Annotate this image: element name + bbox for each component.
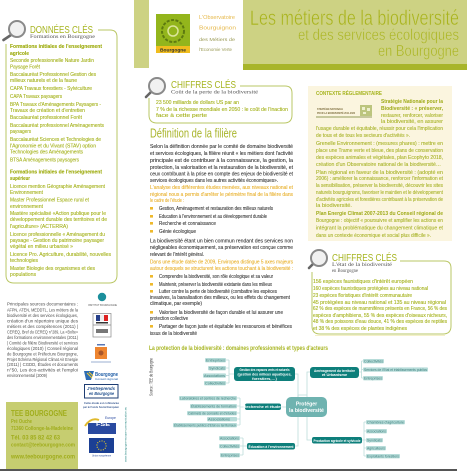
list: périmètre: Recherche et connaissance xyxy=(159,221,216,227)
logo: Observatoire Bourguignon: Bourgogne xyxy=(160,48,186,54)
pills: acteurs aménagement: Entreprises xyxy=(364,375,382,380)
text: formations agricoles: milieux naturels et de la faune xyxy=(10,78,77,84)
logo caption: L'Observatoire xyxy=(199,15,235,21)
panel: définition de la filière xyxy=(150,126,293,337)
list: périmètre: Gestion, Aménagement et restauration des milieux naturels xyxy=(159,206,273,212)
pills: acteurs éducation: Entreprises xyxy=(221,452,239,457)
heading: chiffres clés: Coût de la perte de la biodiversité xyxy=(171,90,259,96)
heading: chiffres clés: en Bourgogne xyxy=(332,268,359,274)
text: définition paragraphe: services écologiques dans les autres activités économiques». xyxy=(150,178,278,184)
text: plan régional xyxy=(316,170,443,209)
pills: acteurs production: Chambres d'agriculture xyxy=(367,419,404,424)
text: plan énergie climat: Bourgogne : objectif « poursuivre et amplifier les actions en xyxy=(316,218,443,224)
pills: acteurs recherche: Laboratoires et centres de recherche xyxy=(180,395,236,400)
pills: acteurs recherche xyxy=(173,395,237,427)
text: sources documentaires: environnemental (2009) xyxy=(7,373,47,379)
text: biodiversité bien commun: La biodiversité étant un bien commun rendant des services non xyxy=(150,239,293,245)
panel: chiffres clés état xyxy=(309,250,451,334)
list: cinq axes: climatique, par exemple) xyxy=(150,301,202,307)
logo caption xyxy=(199,15,236,52)
list: cinq axes: Partager de façon juste et équitable les ressources et bénéfices xyxy=(159,324,292,330)
list: périmètre xyxy=(150,206,273,235)
text: cofinancement xyxy=(83,401,119,409)
text: formations agricoles: Paysage Forêt xyxy=(10,64,40,70)
pills: acteurs aménagement: Collectivités xyxy=(364,358,383,363)
text: vertical url: www.bourgogne-europe-communication.eu xyxy=(124,407,128,462)
text: formations agricoles: l'Agronomie et du Vivant (STAV) option xyxy=(10,143,96,149)
text: formations agricoles: Baccalauréat professionnel Forêt xyxy=(10,115,82,121)
text: sources documentaires: des formations environnementales (2011) xyxy=(7,335,78,341)
text: état de la biodiversité: et 38 % des espèces de plantes indigènes xyxy=(313,326,407,332)
panel: contact TEE Bourgogne: www.teebourgogne.com xyxy=(10,454,75,460)
pills: acteurs production: Associations xyxy=(367,428,386,433)
pills: acteurs gestion: Syndicats xyxy=(209,365,225,370)
text: formations agricoles: Formations initiales de l'enseignement xyxy=(10,44,102,50)
list: cinq axes: Maintenir, préserver la biodiversité existante dans les milieux xyxy=(159,282,272,288)
image: stratégie nationale thumbnail xyxy=(316,105,372,117)
text: cofinancement: Cette étude est cofinancée xyxy=(84,401,119,405)
logo: ademe xyxy=(91,344,111,363)
icon: teal round logo xyxy=(88,293,117,307)
text: enviropea xyxy=(150,260,293,272)
text: formations supérieures xyxy=(10,170,111,278)
text: analyse: L'analyse des différentes études menées, aux niveaux national et xyxy=(150,185,293,191)
heading: données clés: DONNÉES CLÉS xyxy=(30,23,93,36)
text: sources documentaires: (2011) | CGDD, Études et documents xyxy=(7,361,78,368)
text: stratégie nationale: Stratégie Nationale pour la xyxy=(381,99,443,105)
list: cinq axes: issus de la biodiversité xyxy=(150,331,197,337)
text: sources documentaires: CEREQ, Bref du CEREQ n°289, La «Boîte» xyxy=(7,330,78,336)
text: analyse xyxy=(150,185,293,204)
text: plan régional: 2006) : améliorer la connaissance, renforcer l'information et xyxy=(316,176,443,182)
logo: Europe Bourgogne: FSE xyxy=(96,422,111,428)
logo: Observatoire Bourguignon xyxy=(156,14,190,54)
logo caption: l'Economie Verte xyxy=(199,47,233,52)
logo: union européenne flag xyxy=(89,438,114,458)
panel: contact TEE Bourgogne xyxy=(6,402,78,469)
text: grenelle: création d'un Observatoire national de la biodiversité… xyxy=(316,162,441,168)
text: état de la biodiversité: 156 espèces faunistiques d'intérêt européen xyxy=(313,279,413,285)
text: formations agricoles: Seconde professionnelle Nature Jardin xyxy=(10,58,94,64)
text: formations agricoles: CAPA Travaux paysagers xyxy=(10,94,62,100)
text: état de la biodiversité: espèces d'amphibiens, 55 % des espèces d'oiseaux nicheurs, xyxy=(313,313,447,319)
text: stratégie nationale: Biodiversité : « préserver, xyxy=(381,106,443,112)
text: stratégie nationale: la biodiversité, en assurer xyxy=(381,119,443,125)
panel: contexte réglementaire xyxy=(308,86,452,241)
text: biodiversité bien commun: négligeables économiquement, sa préservation est conçue comme xyxy=(150,245,293,251)
text: sources documentaires: AFPN, ATEN, MEDDTL, Les métiers de la xyxy=(7,308,78,314)
icon: magnifier xyxy=(4,21,25,40)
heading: contexte: CONTEXTE RÉGLEMENTAIRE xyxy=(316,89,382,97)
text: sources documentaires: de Bourgogne et Préfecture Bourgogne, xyxy=(7,352,78,358)
image: stratégie nationale thumbnail: POUR LA BIODIVERSITÉ 2011-2020 xyxy=(317,110,355,115)
text: coût: 7 % de la richesse mondiale en 2050 : le coût de l'inaction xyxy=(156,107,288,113)
text: formations supérieures: Master Professionnel Espace rural et xyxy=(10,198,89,204)
node: centre: la biodiversité xyxy=(289,408,324,414)
list: cinq axes: Valoriser la biodiversité de façon durable et lui assurer une xyxy=(159,310,283,316)
text: sources documentaires: Projet Schéma Régional Climat Air Energie xyxy=(7,357,78,363)
pills: acteurs gestion: Associations xyxy=(204,373,225,378)
text: sources documentaires xyxy=(7,302,79,379)
icon: magnifier xyxy=(146,78,165,97)
diagram: protéger la biodiversité xyxy=(173,357,428,458)
text: formations supérieures: populations xyxy=(10,272,36,278)
text: définition paragraphe: et services écologiques, la filière réunit « les métiers dont l'activité xyxy=(150,151,293,157)
text: formations supérieures: Environnement xyxy=(10,190,43,196)
text: définition paragraphe: protection, la valorisation et la restauration de la biodiversité, et xyxy=(150,165,293,171)
partner logos xyxy=(83,293,128,462)
logo: Europe Bourgogne: Europe xyxy=(105,416,116,420)
pills: acteurs recherche: Établissements publics d'Etat ou territoriaux xyxy=(174,422,236,427)
text: formations agricoles: Travaux de création et d'entretien xyxy=(10,108,85,114)
title xyxy=(250,7,459,60)
header band xyxy=(134,0,467,70)
node: éducation xyxy=(247,443,295,450)
logo: préfecture xyxy=(93,314,111,337)
text: stratégie nationale: de tous et de tous les secteurs d'activités ». xyxy=(316,133,410,139)
logo caption: Bourguignon xyxy=(199,26,236,32)
decorative faint line xyxy=(315,334,445,336)
heading: chiffres clés: L'état de la biodiversité xyxy=(332,262,393,268)
logo: Bourgogne conseil régional: Conseil régional xyxy=(95,377,119,381)
text: formations agricoles: BTSA Aménagements paysagers xyxy=(10,158,79,164)
panel: contact TEE Bourgogne: 71360 Collonge-la-Madeleine xyxy=(11,426,73,432)
text: plan régional: la biodiversité. xyxy=(316,203,352,209)
node: aménagement xyxy=(310,367,359,378)
logo: union européenne flag: Union européenne xyxy=(92,454,111,458)
pills: acteurs recherche: Associations xyxy=(208,416,230,421)
node: gestion des espaces: Gestion des espaces verts et naturels xyxy=(240,367,290,372)
text: formations supérieures: végétal en milieu urbanisé » xyxy=(10,244,73,250)
logo: Europe Bourgogne xyxy=(85,416,116,434)
text: état de la biodiversité: 45 protégées au niveau national et 135 au niveau régional xyxy=(313,300,446,306)
panel: contact TEE Bourgogne: contact@teebourgogne.com xyxy=(11,442,75,448)
text: formations supérieures: Mastère spécialisé «Action publique pour le xyxy=(10,211,106,217)
text: état de la biodiversité xyxy=(313,279,447,332)
icon: teal round logo: INSTITUT BOURGOGNE xyxy=(88,303,117,307)
text: état de la biodiversité: 48 % des poissons d'eau douce, 41 % des espèces de reptiles xyxy=(313,319,447,325)
text: stratégie nationale xyxy=(316,99,443,139)
pills: acteurs aménagement xyxy=(363,358,428,380)
pills: acteurs éducation: Collectivités xyxy=(220,443,239,448)
logo: Bourgogne conseil régional xyxy=(84,371,119,381)
pills: acteurs éducation xyxy=(219,435,240,457)
text: formations agricoles xyxy=(10,44,104,164)
text: biodiversité bien commun: relevant de l'intérêt général. xyxy=(150,252,204,258)
heading: protection de la biodiversité: La protection de la biodiversité : domaines professionnels et types d'acteurs xyxy=(149,345,328,352)
node: production: Production agricole et sylvicole xyxy=(314,438,361,443)
text: enviropea: Dans une étude datée de 2009, Enviropea distingue 5 axes majeurs xyxy=(150,260,293,266)
text: plan énergie climat: dans un contexte économique et social plus difficile ». xyxy=(316,233,431,239)
pills: acteurs production: Exploitants forestiers xyxy=(367,453,399,458)
text: plan énergie climat: Plan Energie Climat 2007-2013 du Conseil régional de xyxy=(316,211,443,217)
text: coût: 23 500 milliards de dollars US par an xyxy=(156,100,239,106)
text: analyse: régional nous a permis d'arrêter le périmètre final de la filière dans xyxy=(150,192,293,198)
pills: acteurs gestion xyxy=(203,357,226,385)
text: sources documentaires: biodiversité et des services écologiques, xyxy=(7,313,78,319)
list: cinq axes: Comprendre la biodiversité, son rôle écologique et sa valeur xyxy=(159,274,273,280)
text: formations agricoles: BPA Travaux d'Aménagements Paysagers - xyxy=(10,102,101,108)
text: définition paragraphe: principale est de contribuer à la connaissance, la gestion, la xyxy=(150,158,293,164)
text: stratégie nationale: l'usage durable et équitable, réussir pour cela l'implication xyxy=(316,126,443,132)
pills: acteurs recherche: Établissements de formation xyxy=(191,403,236,408)
list: cinq axes: invasives, la banalisation des milieux, ou les effets du changement xyxy=(150,295,290,301)
text: sources documentaires: | Comité de filière Biodiversité et services xyxy=(7,340,78,346)
text: définition paragraphe xyxy=(150,144,293,184)
text: formations supérieures: Licence mention Géographie Aménagement xyxy=(10,184,105,190)
text: formations agricoles: Baccalauréat Professionnel Gestion des xyxy=(10,72,96,78)
heading: définition: Définition de la filière xyxy=(150,126,237,140)
list: cinq axes xyxy=(150,274,292,337)
text: formations supérieures: Master Biologie des organismes et des xyxy=(10,266,95,272)
node: centre xyxy=(286,397,327,417)
pills: acteurs gestion: Collectivités xyxy=(205,380,225,385)
node: aménagement: Aménagement du territoire xyxy=(314,368,356,373)
panel: données clés xyxy=(4,21,117,283)
list: cinq axes: protection collective xyxy=(150,316,188,322)
logo: j'entreprends en Bourgogne xyxy=(84,384,118,398)
panel: chiffres clés coût xyxy=(146,78,292,123)
text: source vertical: Source : TEE de Bourgogne xyxy=(148,358,154,396)
node: production xyxy=(312,437,362,444)
node: aménagement: et Urbanisme xyxy=(322,372,348,377)
text: formations agricoles: Technologies des Aménagements xyxy=(10,149,83,155)
text: grenelle xyxy=(316,141,443,168)
text: formations agricoles: CAPA Travaux forestiers - Sylviculture xyxy=(10,86,92,92)
text: coût xyxy=(156,100,288,119)
text: formations agricoles: Baccalauréat professionnel Aménagements xyxy=(10,123,104,129)
text: définition paragraphe: ceux contribuant à la prise en compte des enjeux de biodiversité et xyxy=(150,172,293,178)
text: état de la biodiversité: 23 espèces floristiques d'intérêt communautaire xyxy=(313,293,412,299)
image: stratégie nationale thumbnail: STRATÉGIE NATIONALE xyxy=(317,106,343,111)
text: plan régional: la sensibilisation, préserver la biodiversité, découvrir les sites xyxy=(316,183,443,189)
text: formations supérieures: environnement xyxy=(10,204,43,210)
text: sources documentaires: écologiques (2010) | Conseil régional xyxy=(7,346,78,352)
text: plan régional: Plan régional en faveur de la biodiversité : (adopté en xyxy=(316,170,443,176)
node: gestion des espaces: (gestion des milieux aquatiques, xyxy=(238,372,292,376)
pills: acteurs aménagement: Services de l'Etat et établissements publics xyxy=(364,367,427,372)
text: grenelle: place une Trame verte et bleue, des plans de conservation xyxy=(316,148,443,154)
text: analyse: le cadre de l'étude : xyxy=(150,198,184,204)
text: stratégie nationale: restaurer, renforcer, valoriser xyxy=(381,113,443,119)
text: formations supérieures: Formations initiales de l'enseignement xyxy=(10,170,102,176)
node: gestion des espaces: forestiers,…) xyxy=(252,376,277,381)
heading: chiffres clés xyxy=(332,251,397,274)
text: plan énergie climat xyxy=(316,211,444,239)
list: périmètre: Education à l'environnement et au développement durable xyxy=(159,214,267,220)
text: enviropea: autour desquels se structurent les actions touchant à la biodiversité : xyxy=(150,266,293,272)
text: formations agricoles: agricole xyxy=(10,51,29,57)
text: plan énergie climat: intégrant la problématique du changement climatique et xyxy=(316,226,444,232)
text: état de la biodiversité: 160 espèces faunistiques protégées au niveau national xyxy=(313,286,428,292)
text: sources documentaires: métiers et des compétences (2011) | xyxy=(7,324,78,330)
pills: acteurs production xyxy=(366,419,405,458)
text: formations agricoles: paysagers xyxy=(10,129,31,135)
text: formations supérieures: Licence Pro. Agriculture, durabilité, nouvelles xyxy=(10,252,111,258)
text: formations supérieures: paysage - Gestion du patrimoine paysager xyxy=(10,238,104,244)
panel: contact TEE Bourgogne: Pré Ouche xyxy=(11,419,32,425)
text: formations supérieures: technologies xyxy=(10,258,38,264)
heading: chiffres clés: CHIFFRES CLÉS xyxy=(332,251,397,264)
text: sources documentaires: création d'un répertoire unique des xyxy=(7,318,79,324)
text: état de la biodiversité: 62 % des espèces de mammifères présents en France, 56 % des xyxy=(313,306,447,312)
pills: acteurs production: Syndicats xyxy=(367,437,382,442)
icon: magnifier xyxy=(309,250,327,268)
logo: j'entreprends en Bourgogne: en Bourgogne xyxy=(89,391,115,396)
text: cofinancement: par le Fonds Social Européen xyxy=(83,405,119,409)
text: coût: face à cette perte xyxy=(156,113,207,119)
list: cinq axes: Lutter contre la perte de biodiversité (combattre les espèces xyxy=(159,289,277,295)
logo: j'entreprends en Bourgogne: J'entreprends xyxy=(87,386,116,391)
text: formations supérieures: Licence professionnelle « Aménagement du xyxy=(10,232,105,238)
text: plan régional: naturels bourguignons, favoriser le maintien et le développement xyxy=(316,190,443,196)
connectors xyxy=(226,360,366,456)
text: sources documentaires: n°50, Les éco-activités et l'emploi xyxy=(7,368,78,374)
heading: données clés xyxy=(30,23,96,40)
text: formations supérieures: supérieur xyxy=(10,176,31,182)
text: sources documentaires: Principales sources documentaires : xyxy=(7,302,78,308)
logo caption: des Métiers de xyxy=(199,37,235,43)
pills: acteurs gestion: Entreprises xyxy=(206,357,225,362)
logo: Bourgogne conseil régional: Bourgogne xyxy=(95,372,118,378)
heading: chiffres clés xyxy=(171,78,259,96)
text: biodiversité bien commun xyxy=(150,239,293,258)
pills: acteurs production: Agriculteurs xyxy=(367,445,385,450)
text: définition paragraphe: Selon la définition donnée par le comité de domaine biodiversité xyxy=(150,144,293,150)
node: centre: Protéger xyxy=(296,402,317,408)
panel: contact TEE Bourgogne: TEE BOURGOGNE xyxy=(11,409,68,418)
text: formations supérieures: développement durable des territoires et de xyxy=(10,217,107,223)
text: grenelle: des espèces animales et végétales, plan Ecophyto 2018, xyxy=(316,155,443,161)
pills: acteurs recherche: Cabinets de conseils et d'études xyxy=(188,410,236,415)
text: formations agricoles: Baccalauréat Sciences et Technologies de xyxy=(10,137,101,143)
panel: contact TEE Bourgogne: Tél. 03 85 82 42 63 xyxy=(11,436,61,442)
pills: acteurs éducation: Associations xyxy=(220,435,239,440)
node: éducation: Éducation à l'environnement xyxy=(248,444,294,449)
node: recherche et études: Recherche et études xyxy=(243,404,283,409)
heading: chiffres clés: CHIFFRES CLÉS xyxy=(171,78,236,91)
bottom rule xyxy=(0,469,457,471)
node: gestion des espaces xyxy=(234,367,295,381)
text: plan régional: d'activités agricoles et forestières contribuant à la préservation de xyxy=(316,197,443,203)
text: formations supérieures: l'agriculture» (ACTERRA) xyxy=(10,224,68,230)
list: périmètre: Génie écologique xyxy=(159,229,196,235)
heading: données clés: Formations en Bourgogne xyxy=(30,34,96,40)
text: grenelle: Grenelle Environnement : (mesures phares) : mettre en xyxy=(316,141,443,147)
